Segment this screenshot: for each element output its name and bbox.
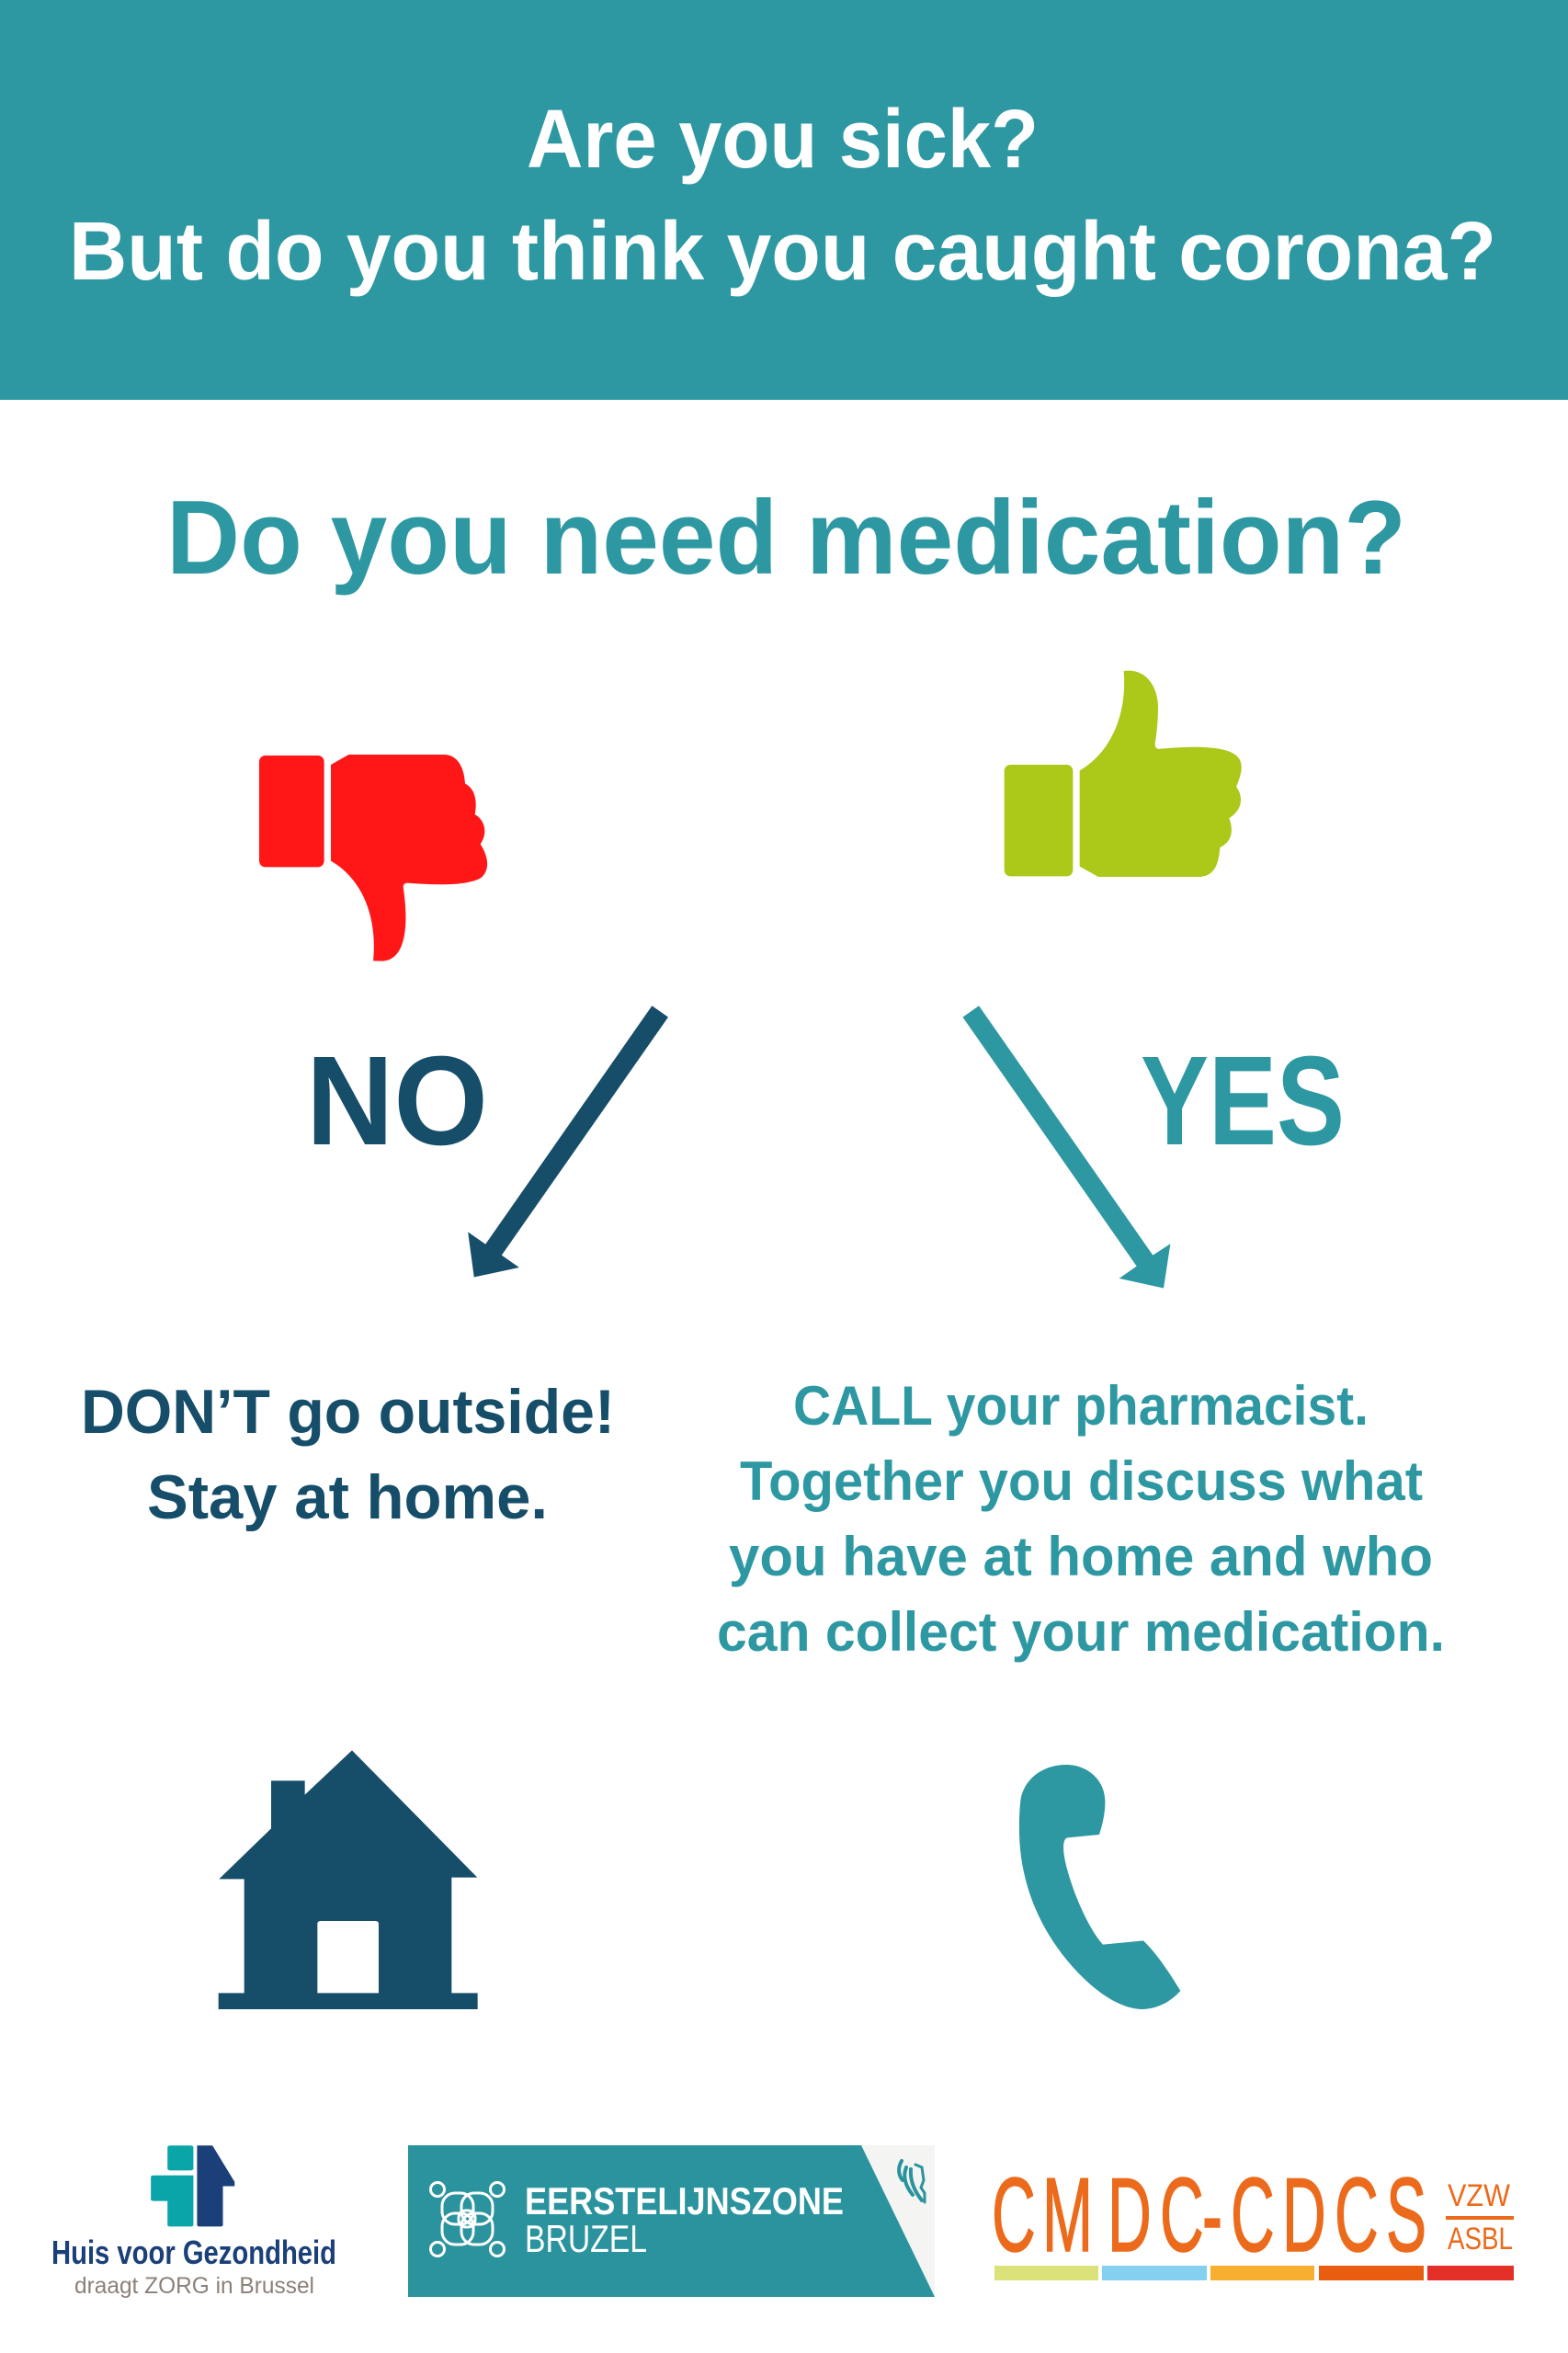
logo: Eerstelijnszone Bruzel [408, 2145, 935, 2297]
text: yes advice: CALL your pharmacist. [793, 1375, 1369, 1437]
logo name: Huis voor Gezondheid [51, 2234, 336, 2271]
zone name: EERSTELIJNSZONE [525, 2179, 844, 2222]
header banner [0, 0, 1568, 400]
text: no advice: DON’T go outside! [81, 1377, 615, 1447]
title [69, 94, 1496, 298]
icon: thumbs up [1005, 671, 1242, 877]
arrow: no [468, 1006, 668, 1278]
text: yes advice [717, 1375, 1445, 1663]
label: NO: NO [306, 1030, 488, 1172]
organisation name: CMDC-CDCS [992, 2156, 1426, 2273]
colour bars [994, 2266, 1514, 2280]
logo: Huis voor Gezondheid [51, 2145, 336, 2299]
title: But do you think you caught corona? [69, 206, 1496, 298]
logo mark [151, 2145, 234, 2226]
network icon [430, 2182, 504, 2256]
text: no advice: Stay at home. [147, 1462, 548, 1532]
icon: Flemish lion [899, 2161, 925, 2202]
text: yes advice: Together you discuss what [740, 1450, 1423, 1512]
heading: question: Do you need medication? [166, 480, 1406, 597]
icon: phone [1019, 1765, 1180, 2009]
label: YES: YES [1141, 1030, 1345, 1172]
zone subname: BRUZEL [525, 2217, 647, 2260]
text: yes advice: can collect your medication. [717, 1601, 1445, 1663]
text: no advice [81, 1377, 615, 1532]
arrow: yes [962, 1006, 1170, 1289]
logo: CMDC-CDCS [992, 2156, 1514, 2280]
VZW: VZW [1448, 2178, 1510, 2213]
icon: thumbs down [259, 755, 487, 961]
logo tagline: draagt ZORG in Brussel [74, 2273, 314, 2299]
icon: house [219, 1750, 478, 2009]
title: Are you sick? [527, 94, 1039, 186]
ASBL: ASBL [1448, 2222, 1513, 2256]
text: yes advice: you have at home and who [729, 1526, 1433, 1587]
